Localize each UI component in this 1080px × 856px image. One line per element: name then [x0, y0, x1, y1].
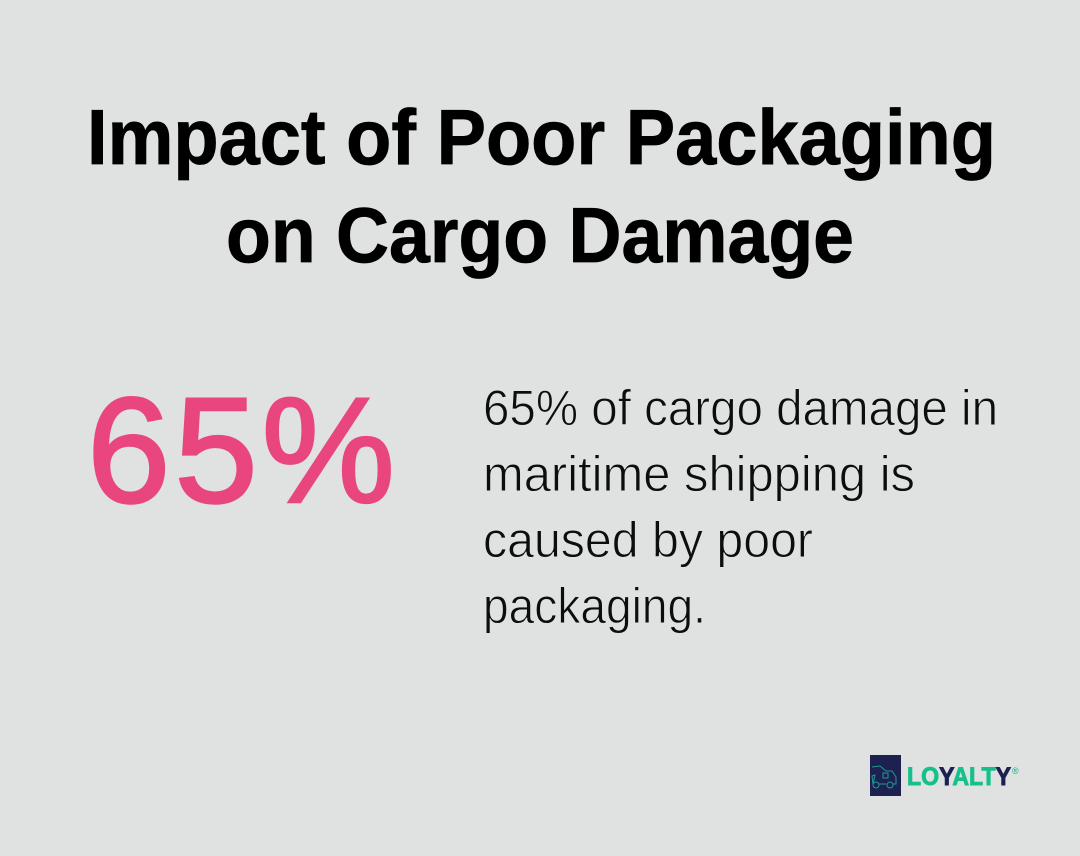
logo registered mark: ® [1012, 766, 1019, 776]
description text [483, 380, 998, 634]
title [87, 93, 996, 279]
logo: Loyalty [870, 755, 1019, 796]
icon: truck badge [870, 755, 901, 796]
logo wordmark: LOYALTY [907, 763, 1011, 791]
description text: packaging. [483, 578, 706, 634]
description text: maritime shipping is [483, 446, 915, 502]
title: Impact of Poor Packaging [87, 93, 996, 181]
title: on Cargo Damage [226, 191, 854, 279]
big statistic: 65%: 65% [87, 366, 395, 534]
description text: caused by poor [483, 512, 813, 568]
description text: 65% of cargo damage in [483, 380, 998, 436]
